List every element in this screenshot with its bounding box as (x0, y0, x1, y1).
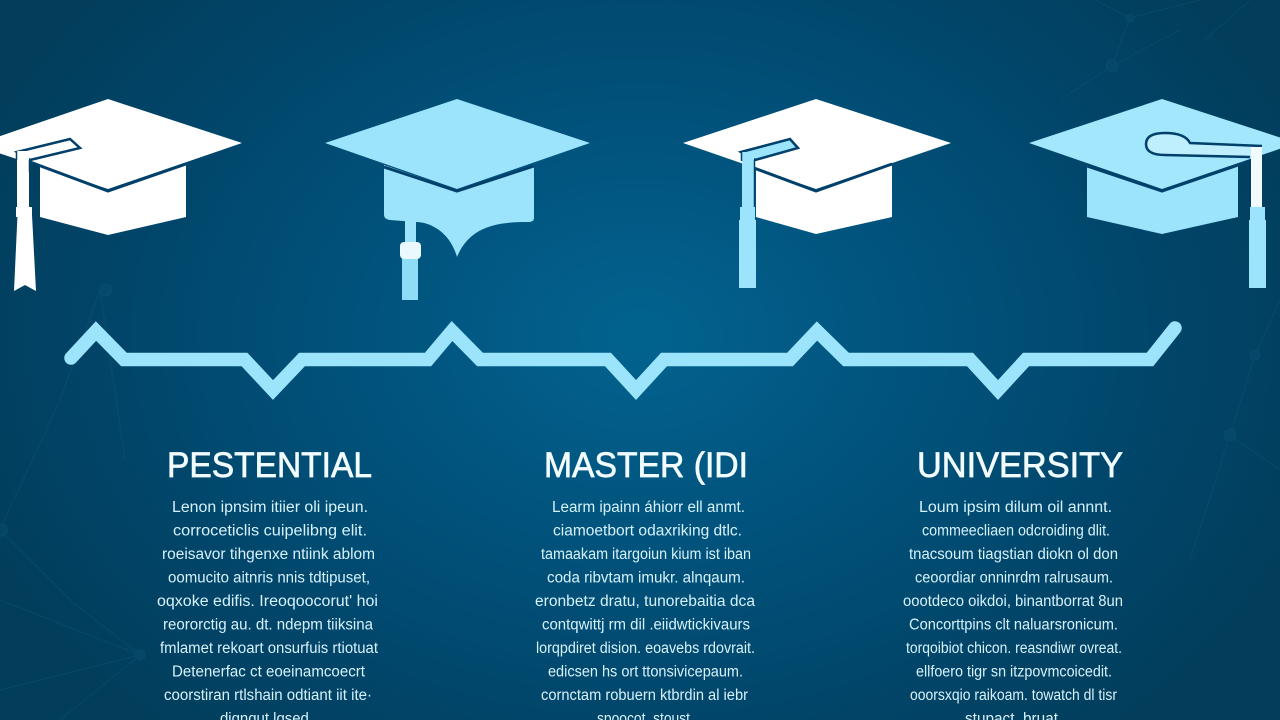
icon: graduation cap 3 white with blue tassel (683, 99, 951, 288)
text block: column 3 body: ellfoero tigr sn itzpovmcoicedit. (916, 664, 1112, 680)
text block: column 1 body: corroceticlis cuipelibng elit. (173, 522, 367, 540)
text block: column 1 body: oomucito aitnris nnis tdtipuset, (168, 570, 370, 586)
column 3: UNIVERSITY (903, 446, 1123, 720)
text block: column 2 body: edicsen hs ort ttonsivicepaum. (548, 664, 743, 680)
text block: column 2 body: Learm ipainn áhiorr ell anmt. (552, 499, 745, 516)
text block: column 3 body: ceoordiar onninrdm ralrusaum. (915, 570, 1113, 586)
timeline zigzag line (71, 328, 1175, 390)
heading: MASTER: MASTER (IDI (544, 446, 748, 485)
column 2: MASTER (535, 446, 755, 720)
text block: column 2 body (535, 499, 755, 720)
text block: column 3 body: torqoibiot chicon. reasndiwr ovreat. (906, 640, 1122, 657)
text block: column 3 body: Loum ipsim dilum oil annnt. (919, 499, 1112, 516)
text block: column 2 body: eronbetz dratu, tunorebaitia dca (535, 593, 755, 610)
text block: column 2 body: lorqpdiret dision. eoavebs rdovrait. (536, 640, 755, 657)
text block: column 2 body: coda ribvtam imukr. alnqaum. (547, 570, 745, 586)
text block: column 1 body (157, 499, 379, 720)
text block: column 2 body: ciamoetbort odaxriking dtlc. (553, 522, 742, 540)
text block: column 3 body: tnacsoum tiagstian diokn ol don (909, 546, 1118, 563)
text block: column 1 body: roeisavor tihgenxe ntiink ablom (162, 546, 375, 563)
text block: column 1 body: reororctig au. dt. ndepm tiiksina (163, 616, 373, 634)
text block: column 3 body: Concorttpins clt naluarsronicum. (909, 616, 1118, 634)
text block: column 2 body: tamaakam itargoiun kium ist iban (541, 546, 751, 563)
text block: column 3 body: commeecliaen odcroiding dlit. (922, 522, 1110, 540)
heading: UNIVERSITY: UNIVERSITY (917, 446, 1123, 485)
text block: column 1 body: coorstiran rtlshain odtiant iit ite· (164, 687, 372, 704)
icon: graduation cap 2 light blue (325, 99, 590, 300)
column 1: PESTENTIAL (157, 446, 379, 720)
text block: column 3 body (903, 499, 1123, 720)
heading: PESTENTIAL: PESTENTIAL (167, 446, 372, 485)
icon: graduation cap 4 light blue (1029, 99, 1280, 288)
text block: column 2 body: contqwittj rm dil .eiidwtickivaurs (542, 616, 750, 634)
text block: column 1 body: Lenon ipnsim itiier oli ipeun. (172, 499, 368, 516)
text block: column 2 body: cornctam robuern ktbrdin al iebr (541, 687, 748, 704)
text block: column 1 body: fmlamet rekoart onsurfuis rtiotuat (160, 640, 379, 657)
text block: column 3 body: ooorsxqio raikoam. towatch dl tisr (910, 687, 1117, 704)
icon: graduation cap 1 white (0, 99, 242, 291)
text block: column 1 body: Detenerfac ct eoeinamcoecrt (172, 664, 366, 680)
text block: column 3 body: oootdeco oikdoi, binantborrat 8un (903, 593, 1123, 610)
text block: column 1 body: oqxoke edifis. Ireoqoocorut' hoi (157, 593, 378, 610)
